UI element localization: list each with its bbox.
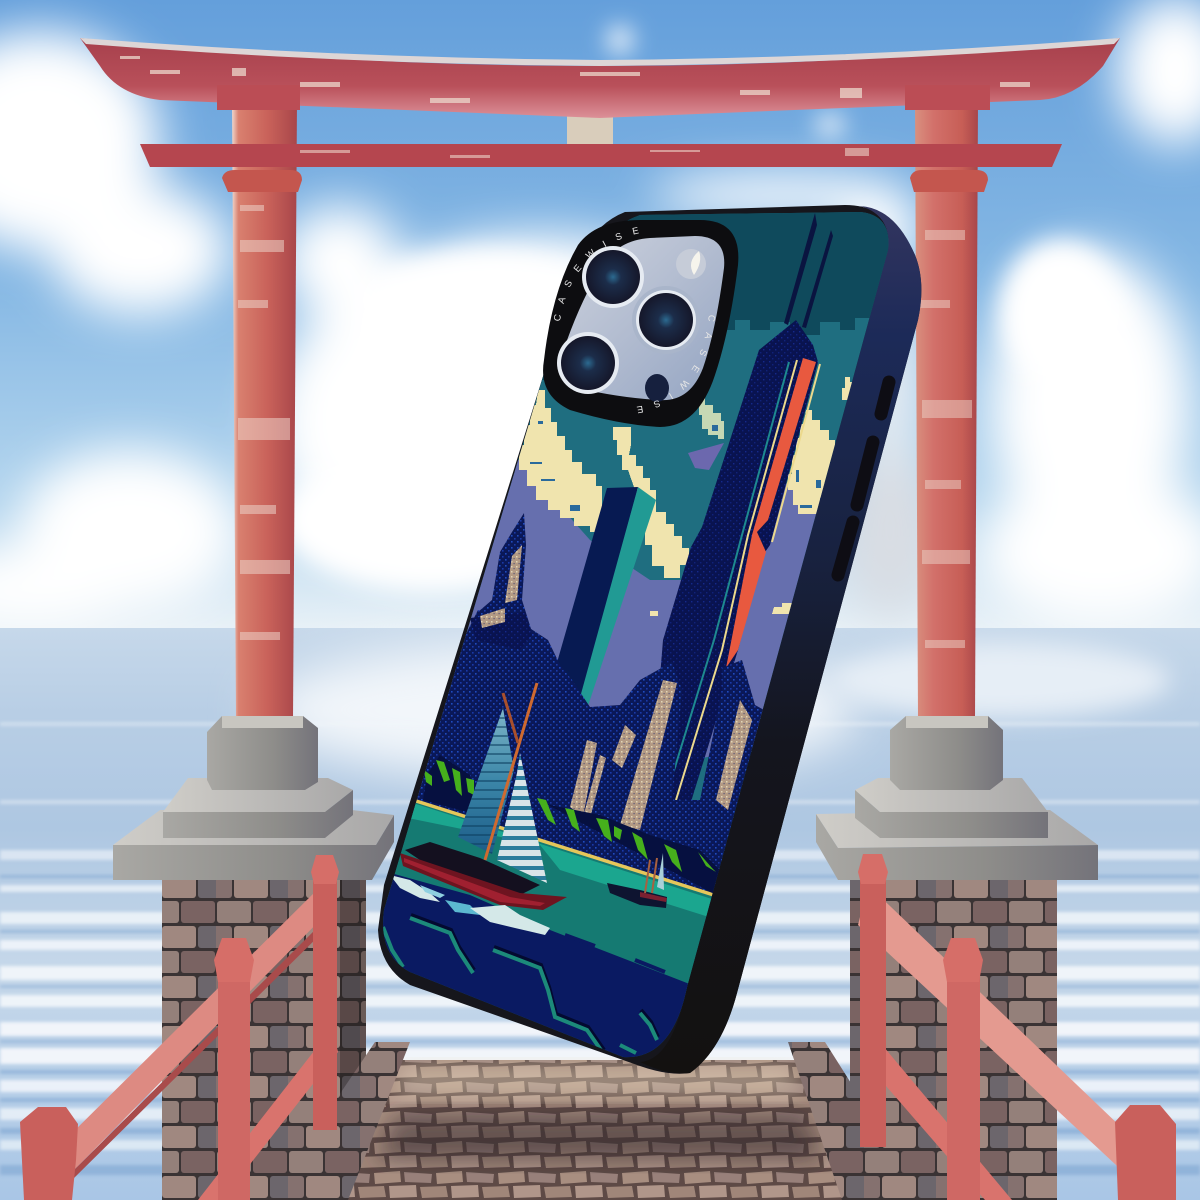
main skyscraper [650,213,833,805]
phone [378,205,922,1074]
microphone sensor [645,374,669,402]
brand text [554,227,715,414]
phone case body [378,205,921,1074]
camera island [543,220,738,427]
right railing [858,854,1176,1200]
pixel wave lines [383,915,690,1053]
left pillar [222,100,302,718]
right stone plinth [816,716,1098,1200]
stone bridge [268,1042,925,1200]
black camera ring [543,220,738,427]
city skyline [416,608,763,902]
side buttons [838,382,889,575]
tree line [423,755,720,895]
cloud details [530,421,821,511]
centre skyscraper [552,487,656,712]
brand text: CASEWISE [554,227,639,321]
small boat [607,853,667,908]
flash [676,249,706,279]
brand text: CASEWISE [636,315,715,414]
artwork water [383,800,713,1058]
sailboat [390,683,567,935]
case artwork [370,200,900,1080]
pixel clouds [519,377,856,616]
silver camera plate [560,236,724,400]
left railing [20,855,339,1200]
upper lintel [80,38,1120,118]
clouds [0,0,1200,630]
lens top [582,246,644,308]
left art deco tower [480,513,531,629]
left stone plinth [113,716,394,1200]
lens right [632,286,700,354]
centre strut [567,100,613,144]
case side wall [640,206,921,1074]
water [0,628,1200,1200]
boat wake foam [390,875,550,935]
torii gate [80,38,1120,718]
lens bottom [557,332,619,394]
artwork sky [370,200,900,1070]
right pillar [910,100,988,718]
lavender cloud shadow [688,443,724,470]
lower crossbeam [140,144,1062,167]
sky [0,0,1200,630]
